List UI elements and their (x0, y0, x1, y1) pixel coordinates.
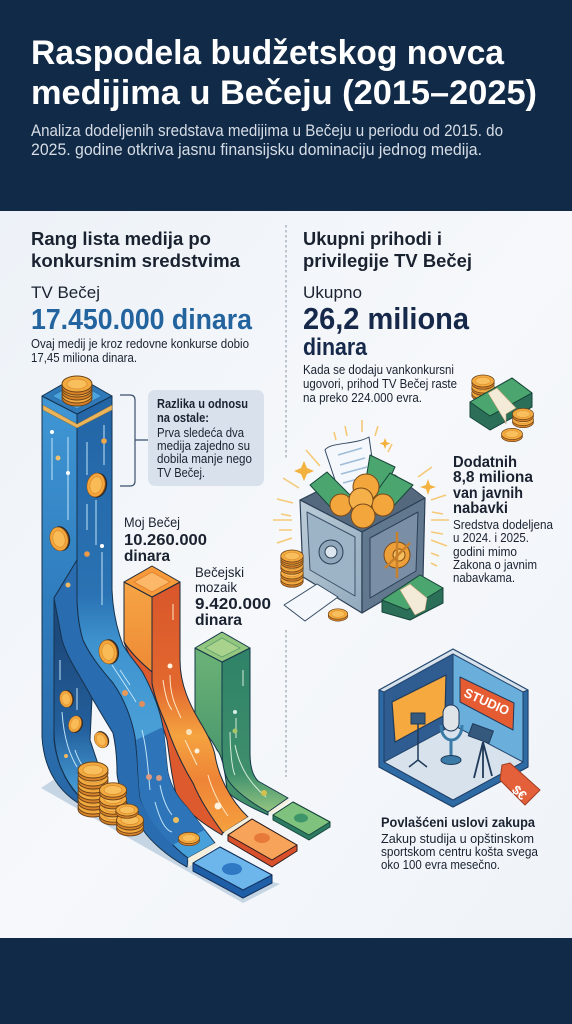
label: Bečejski mozaik: Bečejski (195, 564, 244, 580)
top coin stack (62, 376, 92, 406)
subtitle: Analiza dodeljenih sredstava medijima u Bečeju u periodu od 2015. do (31, 122, 503, 140)
left heading: konkursnim sredstvima (31, 250, 241, 271)
TV Bečej stat: TV Bečej (31, 284, 100, 302)
green column (195, 632, 288, 815)
icon: safe with money (273, 420, 449, 621)
sparkles (294, 438, 436, 495)
callout: medija zajedno su (157, 439, 250, 453)
bills in safe (310, 455, 413, 512)
label: privileged rent: oko 100 evra mesečno. (381, 858, 500, 872)
label: extra millions: 8,8 miliona (453, 469, 533, 486)
TV Bečej stat: 17.450.000 dinara (31, 304, 253, 336)
orange ribbon highlights (163, 604, 228, 816)
callout: Prva sledeća dva (157, 426, 244, 440)
coin pile (281, 573, 303, 587)
label: extra millions: nabavkama. (453, 571, 515, 585)
total stat: ugovori, prihod TV Bečej raste (303, 377, 457, 391)
label: extra millions (453, 454, 553, 585)
callout: TV Bečej. (157, 466, 205, 480)
right heading: privilegije TV Bečej (303, 250, 472, 271)
label: extra millions: nabavki (453, 500, 508, 517)
glow rays (273, 420, 449, 566)
label: privileged rent: Povlašćeni uslovi zakupa (381, 815, 535, 830)
title: medijima u Bečeju (2015–2025) (31, 74, 537, 112)
receipt (325, 437, 378, 510)
label: Moj Bečej: Moj Bečej (124, 514, 180, 530)
total stat: 26,2 miliona (303, 301, 470, 336)
divider (285, 225, 287, 777)
blue end strip (188, 843, 218, 867)
green bill (273, 802, 330, 840)
green end strip (269, 799, 290, 815)
subtitle: 2025. godine otkriva jasnu finansijsku dominaciju jednog medija. (31, 141, 482, 159)
TV Bečej stat (31, 284, 253, 365)
total stat: Ukupno (303, 284, 362, 302)
label: Bečejski mozaik: dinara (195, 612, 242, 629)
price tag (500, 763, 540, 805)
TV Bečej stat: Ovaj medij je kroz redovne konkurse dobio (31, 337, 249, 351)
label: privileged rent (381, 815, 538, 872)
icon: studio: STUDIO (462, 685, 512, 718)
callout: Razlika u odnosu (157, 397, 248, 411)
label: extra millions: u 2024. i 2025. (453, 531, 529, 545)
left heading: Rang lista medija po (31, 228, 211, 249)
callout: na ostale: (157, 411, 209, 425)
header band (0, 0, 572, 211)
page background (0, 211, 572, 938)
callout: dobila manje nego (157, 452, 252, 466)
icon: studio: $€ (509, 782, 530, 803)
bracket (120, 395, 148, 486)
orange bill (228, 819, 297, 867)
right heading: Ukupni prihodi i (303, 228, 442, 249)
label: Moj Bečej (124, 514, 207, 565)
cash bundle (382, 575, 443, 620)
right heading (303, 228, 472, 271)
icon: studio (379, 649, 540, 807)
coins in safe (330, 474, 394, 528)
subtitle (31, 122, 503, 159)
orange column (124, 566, 248, 835)
label: privileged rent: Zakup studija u opštinskom (381, 832, 534, 846)
label: Bečejski mozaik (195, 564, 271, 629)
label: extra millions: van javnih (453, 485, 523, 502)
label: extra millions: Zakona o javnim (453, 558, 537, 572)
blue ribbon highlights (52, 425, 172, 832)
label: Bečejski mozaik: 9.420.000 (195, 596, 271, 613)
orange end strip (224, 817, 251, 836)
callout (148, 390, 264, 486)
label: Moj Bečej: dinara (124, 548, 170, 565)
total stat: dinara (303, 334, 368, 361)
blue column back strip (42, 396, 100, 805)
blue main ribbon (42, 376, 215, 867)
label: extra millions: godini mimo (453, 545, 517, 559)
title (31, 34, 537, 112)
label: extra millions: Dodatnih (453, 454, 517, 471)
total stat: Kada se dodaju vankonkursni (303, 363, 454, 377)
label: privileged rent: sportskom centru košta svega (381, 845, 538, 859)
safe body (300, 500, 362, 613)
chart: ribbon columns (41, 376, 330, 903)
safe opening (300, 475, 425, 532)
label: Bečejski mozaik: mozaik (195, 579, 238, 595)
total stat (303, 284, 470, 405)
icon: cash and coins (470, 375, 534, 442)
title: Raspodela budžetskog novca (31, 34, 505, 72)
blue bill (193, 847, 272, 898)
footer band (0, 938, 572, 1024)
label: Moj Bečej: 10.260.000 (124, 532, 207, 549)
label: extra millions: Sredstva dodeljena (453, 518, 553, 532)
total stat: na preko 224.000 evra. (303, 391, 422, 405)
coin stacks (78, 762, 144, 836)
green ribbon highlights (230, 670, 266, 797)
ground shadow (41, 780, 280, 903)
TV Bečej stat: 17,45 miliona dinara. (31, 351, 137, 365)
left heading (31, 228, 241, 271)
document on floor (284, 584, 338, 621)
blue ribbon coins (47, 471, 200, 846)
